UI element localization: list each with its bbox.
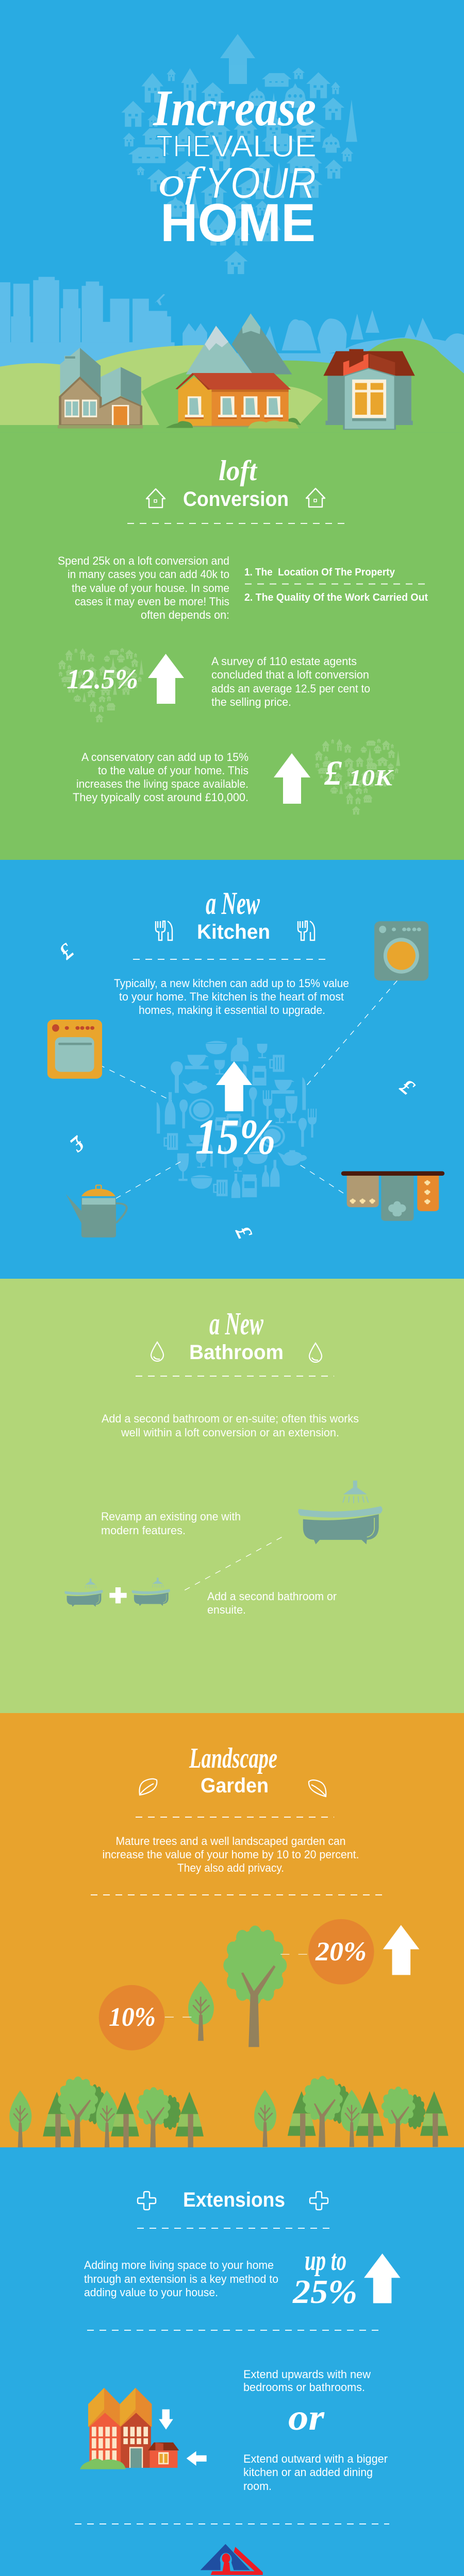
text: loft intro: often depends on: [141,608,229,621]
heading: a new kitchen: Kitchen [197,921,270,943]
pound signs: £ [65,1131,89,1157]
house cluster with up arrow [121,34,357,274]
text: survey: adds an average 12.5 per cent to [211,682,370,695]
title: VALUE [211,129,317,163]
small tree [188,1981,214,2041]
text: extend upwards [243,2368,371,2394]
text: kitchen intro [114,977,349,1016]
heading: landscape garden [139,1742,326,1797]
text: extensions intro: through an extension is a key method to [84,2273,278,2285]
chart: value by tree maturity: 10% [109,2003,156,2032]
heading: loft conversion: loft [219,455,257,487]
chart: value by tree maturity: 20% [315,1937,367,1967]
title: of [158,160,206,205]
text: second bathroom: ensuite. [207,1603,246,1616]
text: extend outward: room. [243,2480,272,2493]
pound signs: £ [230,1222,257,1243]
pound signs [55,939,419,1243]
title: THE [156,129,211,163]
stat: up to 25%: 25% [292,2273,357,2311]
text: kitchen intro: to your home. The kitchen is the heart of most [119,990,344,1003]
icon: tea towels [341,1171,444,1221]
panel: hero [0,0,464,433]
list: what value depends on [244,567,428,603]
heading: extensions: Extensions [183,2189,285,2211]
house: teal with dark red roof [323,349,415,429]
pound signs: £ [395,1074,419,1100]
text: conservatory [73,751,248,804]
large tree [223,1926,287,2047]
text: bathroom intro: Add a second bathroom or en-suite; often this works [102,1412,359,1425]
heading: extensions [138,2189,328,2211]
list: what value depends on: 2. The Quality Of the Work Carried Out [244,592,428,603]
forest [9,2076,449,2147]
dashed connectors [99,980,397,1201]
text: bathroom intro: well within a loft conversion or an extension. [121,1426,339,1439]
text: survey: concluded that a loft conversion [211,668,369,681]
stat: 15%: 15% [195,1109,276,1165]
list: what value depends on: 1. The Location Of The Property [244,567,395,578]
text: revamp: modern features. [101,1524,186,1537]
text: second bathroom [207,1590,337,1616]
arrow: down [159,2410,173,2430]
dashed connector [181,1537,281,1592]
text: survey: A survey of 110 estate agents [211,655,357,668]
arrow [216,1061,252,1111]
text: revamp [101,1510,241,1537]
panel: landscape garden [0,1713,464,2147]
text: extend outward [243,2452,388,2493]
title [153,79,317,253]
stat: 10K [274,739,400,815]
text: survey [211,655,370,708]
text: revamp: Revamp an existing one with [101,1510,241,1523]
hills [0,313,464,433]
heading: a new kitchen: a New [206,886,260,921]
kitchenware cluster [157,1038,317,1198]
logo: MPK Lofts [200,2544,263,2576]
text: survey: the selling price. [211,696,291,708]
heading: loft conversion: Conversion [183,488,289,511]
text: extend outward: Extend outward with a bigger [243,2452,388,2465]
text: extend outward: kitchen or an added dining [243,2466,373,2479]
text: kitchen intro: Typically, a new kitchen can add up to 15% value [114,977,349,990]
stat: 12.5%: 12.5% [67,664,138,694]
text: loft intro: the value of your house. In some [72,582,229,595]
heading: loft conversion [146,455,325,511]
title: Increase [153,79,316,137]
text: garden intro: Mature trees and a well landscaped garden can [115,1835,345,1848]
icon: oven [47,1020,102,1079]
arrow: left [187,2451,207,2466]
pound signs: £ [55,939,79,964]
panel: new kitchen [0,860,464,1279]
text: conservatory: increases the living space available. [76,777,248,790]
house: orange with red roof [175,373,291,427]
text: garden intro: increase the value of your home by 10 to 20 percent. [102,1848,359,1861]
icon: kettle [66,1185,127,1238]
skyline [0,277,464,409]
text: extend upwards: Extend upwards with new [243,2368,371,2381]
mountains [186,313,292,375]
house: tan with teal roofs [58,348,143,429]
text: second bathroom: Add a second bathroom or [207,1590,337,1603]
text: kitchen intro: homes, making it essential to upgrade. [139,1004,325,1016]
heading: a new bathroom [151,1307,322,1364]
text: or: or [288,2397,325,2438]
icon: extended house [80,2388,179,2469]
stat: 12.5% [58,648,184,722]
chart: value by tree maturity [99,1919,419,2050]
heading: landscape garden: Garden [201,1774,269,1797]
heading: a new kitchen [156,886,314,943]
text: loft intro [58,554,229,621]
panel: loft conversion [0,433,464,860]
text: loft intro: cases it may even be more! This [75,595,229,608]
text: conservatory: to the value of your home. This [98,764,248,777]
text: loft intro: in many cases you can add 40k to [68,568,229,581]
icon: two small baths [64,1578,170,1607]
text: conservatory: A conservatory can add up to 15% [81,751,248,764]
heading: a new bathroom: a New [209,1307,263,1342]
bushes [165,418,301,429]
icon: washing machine [374,921,428,980]
stat: up to 25%: up to [305,2245,346,2277]
text: garden intro [102,1835,359,1874]
icon: large bath [298,1481,383,1544]
stat: 10K: £ [324,753,342,792]
text: garden intro: They also add privacy. [177,1861,284,1874]
text: loft intro: Spend 25k on a loft conversion and [58,554,229,567]
title: YOUR [205,159,316,207]
panel: extensions [0,2147,464,2576]
heading: landscape garden: Landscape [189,1742,277,1774]
text: extend upwards: bedrooms or bathrooms. [243,2381,365,2394]
text: extensions intro: Adding more living space to your home [84,2259,274,2272]
stat: 10K: 10K [349,765,394,790]
text: extensions intro: adding value to your house. [84,2286,218,2299]
stat: up to 25% [292,2245,401,2311]
panel: new bathroom [0,1279,464,1713]
title: HOME [160,193,316,253]
text: extensions intro [84,2259,278,2299]
text: conservatory: They typically cost around £10,000. [73,791,248,804]
heading: a new bathroom: Bathroom [189,1341,284,1364]
text: bathroom intro [102,1412,359,1439]
